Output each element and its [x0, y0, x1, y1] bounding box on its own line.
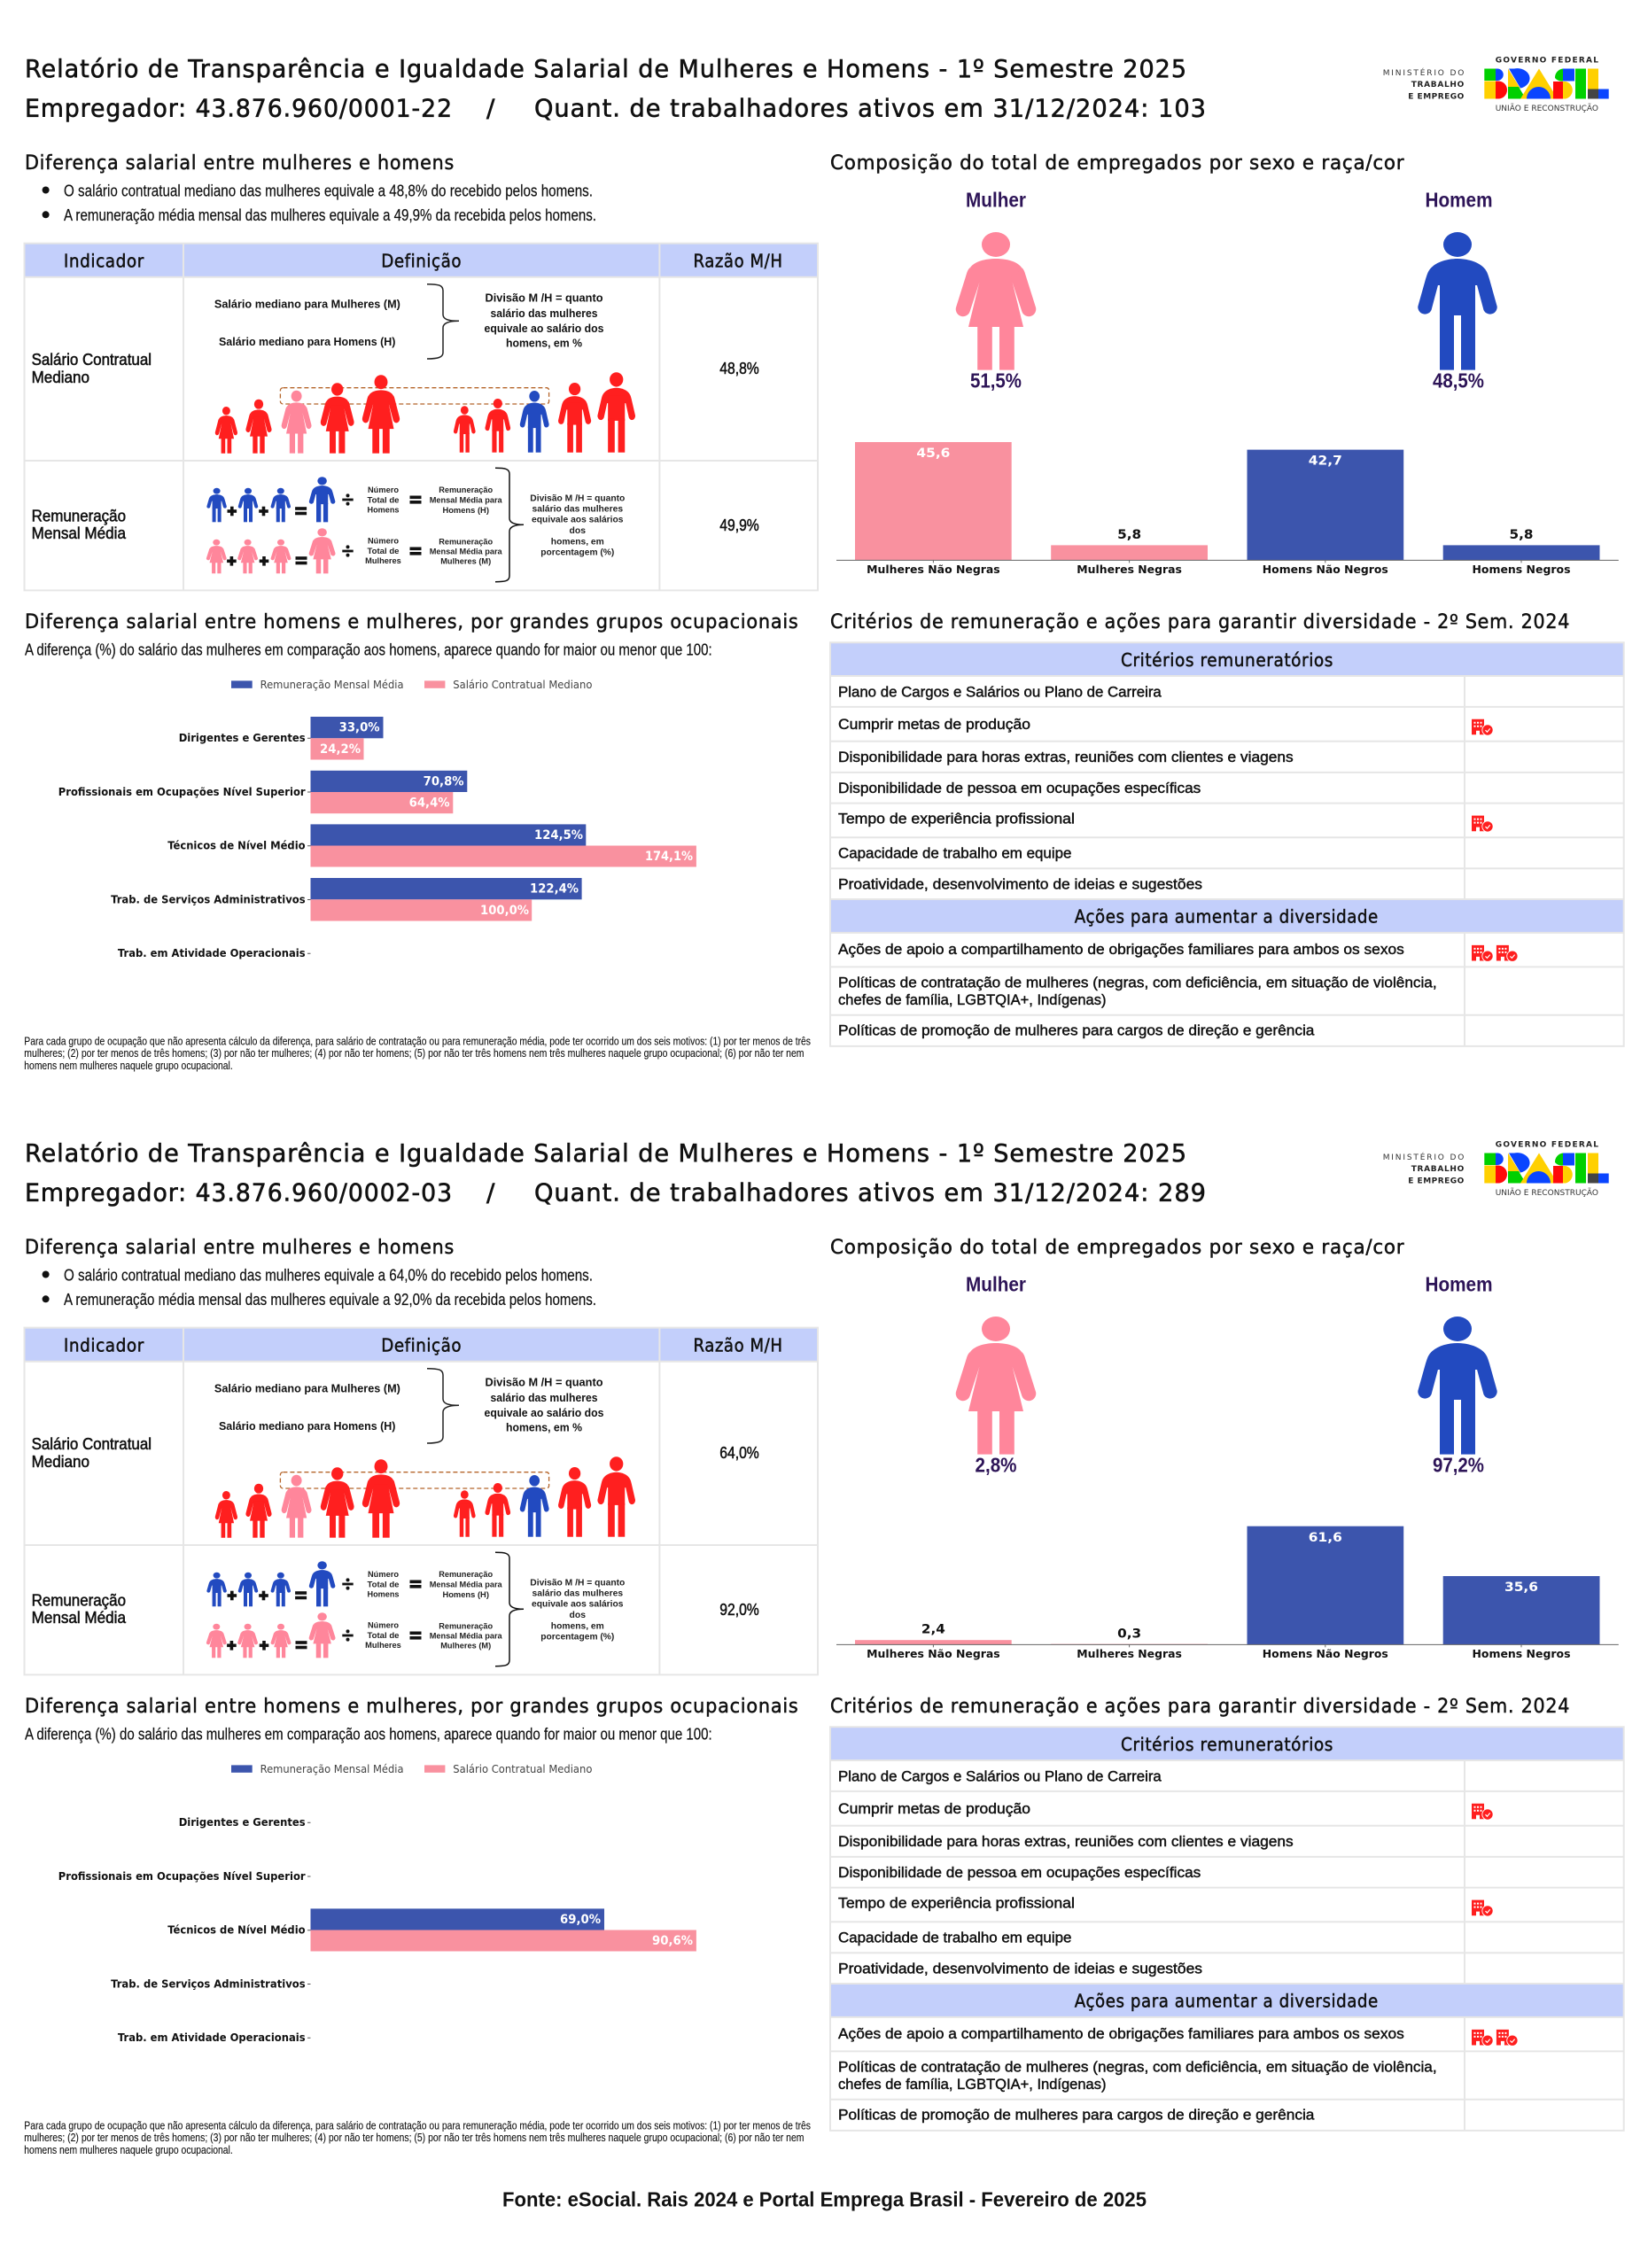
diagram: average pay definition: Mulheres (M)	[440, 557, 491, 567]
diagram: average pay definition: Mensal Média para	[430, 1632, 502, 1642]
legend: Remuneração Mensal Média	[260, 1763, 404, 1775]
bar chart: occupational ratio: Trab. de Serviços Administrativos	[111, 1977, 306, 1990]
title: report heading: Relatório de Transparência e Igualdade Salarial de Mulheres e Homens - 1º Semestre 2025	[25, 1138, 1187, 1168]
icon: woman with share: 51,5%	[970, 369, 1022, 392]
criteria table: Cumprir metas de produção	[838, 1801, 1030, 1817]
footnote: Para cada grupo de ocupação que não apresenta cálculo da diferença, para salário de contratação ou para remuneração média, pode ter ocorrido um dos seis motivos: (1) por ter menos de três	[24, 1035, 811, 1047]
bar chart: sex and race: 35,6	[1504, 1581, 1538, 1595]
diagram: average pay definition: Mensal Média para	[430, 1580, 502, 1589]
diagram: average pay definition: salário das mulheres	[532, 504, 623, 515]
bar chart: sex and race: Mulheres Negras	[1077, 1647, 1182, 1660]
bar chart: occupational ratio	[58, 717, 696, 959]
bar chart: occupational ratio: Técnicos de Nível Médio	[167, 1923, 306, 1937]
logo: Ministério do Trabalho e Emprego / Governo Federal Brasil: E EMPREGO	[1408, 1177, 1465, 1185]
diagram: average pay definition: Homens (H)	[442, 506, 489, 516]
logo: Ministério do Trabalho e Emprego / Governo Federal Brasil: TRABALHO	[1411, 81, 1465, 89]
icon: man with share: 97,2%	[1433, 1453, 1484, 1476]
diagram: average pay definition: homens, em	[551, 536, 604, 547]
logo: Ministério do Trabalho e Emprego / Governo Federal Brasil: MINISTÉRIO DO	[1383, 67, 1464, 78]
criteria table: Disponibilidade para horas extras, reuniões com clientes e viagens	[838, 1834, 1294, 1850]
indicator table: Mediano	[32, 369, 89, 386]
bar chart: sex and race: Homens Negros	[1473, 1647, 1570, 1660]
heading: occupational groups: Diferença salarial entre homens e mulheres, por grandes grupos ocupacionais	[25, 1696, 799, 1718]
legend: Salário Contratual Mediano	[453, 679, 592, 691]
heading: criteria: Critérios de remuneração e ações para garantir diversidade - 2º Sem. 2024	[830, 1696, 1570, 1718]
description: A diferença (%) do salário das mulheres em comparação aos homens, aparece quando for maior ou menor que 100:	[25, 1726, 712, 1744]
diagram: median salary definition: Divisão M /H = quanto	[486, 1376, 603, 1389]
bar chart: sex and race: 42,7	[1309, 454, 1342, 469]
footnote: mulheres; (2) por ter menos de três homens; (3) por não ter mulheres; (4) por não ter homens; (5) por não ter três homens nem três mulheres naquele grupo ocupacional; (6) por não ter nem	[24, 2132, 805, 2144]
indicator table	[25, 244, 818, 590]
bullet list: O salário contratual mediano das mulheres equivale a 48,8% do recebido pelos homens.	[64, 183, 593, 200]
indicator table: Definição	[381, 1335, 462, 1356]
bar chart: sex and race: 61,6	[1309, 1531, 1342, 1545]
diagram: average pay definition	[206, 1552, 625, 1666]
criteria table: Proatividade, desenvolvimento de ideias e sugestões	[838, 876, 1202, 892]
icon: man with share: 48,5%	[1433, 369, 1484, 392]
diagram: average pay definition: Mensal Média para	[430, 548, 502, 557]
report section: establishment 0001-22	[24, 54, 1624, 1072]
indicator table: Razão M/H	[693, 251, 783, 272]
indicator table: 48,8%	[719, 360, 759, 377]
bar chart: occupational ratio: 69,0%	[560, 1913, 601, 1927]
criteria table: Ações de apoio a compartilhamento de obrigações familiares para ambos os sexos	[838, 942, 1404, 958]
diagram: average pay definition: Número	[368, 537, 399, 547]
diagram: average pay definition: Divisão M /H = quanto	[530, 493, 625, 504]
bar chart: occupational ratio: Trab. em Atividade Operacionais	[118, 946, 306, 959]
bar chart: occupational ratio: Trab. em Atividade Operacionais	[118, 2031, 306, 2044]
logo: Ministério do Trabalho e Emprego / Governo Federal Brasil: UNIÃO E RECONSTRUÇÃO	[1496, 1188, 1598, 1198]
bar chart: occupational ratio: Dirigentes e Gerentes	[179, 731, 306, 744]
icon: man with share: Homem	[1425, 189, 1492, 212]
bar chart: occupational ratio: 70,8%	[424, 774, 464, 788]
indicator table: Salário Contratual	[32, 351, 152, 369]
diagram: average pay definition: dos	[570, 1610, 586, 1620]
subtitle: employer and worker count	[25, 94, 1207, 123]
bullet list	[43, 183, 596, 224]
panel: workforce composition	[830, 152, 1619, 576]
diagram: median salary definition: homens, em %	[506, 337, 582, 350]
subtitle: employer and worker count: Quant. de trabalhadores ativos em 31/12/2024: 289	[534, 1178, 1207, 1208]
diagram: average pay definition: Homens (H)	[442, 1590, 489, 1600]
bar chart: sex and race: 2,4	[921, 1623, 945, 1637]
diagram: median salary definition: salário das mulheres	[491, 307, 597, 320]
panel: workforce composition	[830, 1237, 1619, 1660]
icon: woman with share	[956, 1273, 1036, 1476]
diagram: average pay definition: homens, em	[551, 1620, 604, 1631]
diagram: average pay definition: Remuneração	[439, 1570, 493, 1580]
logo: Ministério do Trabalho e Emprego / Governo Federal Brasil: MINISTÉRIO DO	[1383, 1152, 1464, 1162]
diagram: average pay definition: Total de	[367, 547, 399, 556]
criteria table: Ações para aumentar a diversidade	[1075, 905, 1379, 927]
report section: establishment 0002-03	[24, 1138, 1624, 2156]
criteria table: Disponibilidade de pessoa em ocupações específicas	[838, 1865, 1201, 1881]
criteria table: Tempo de experiência profissional	[838, 811, 1075, 827]
criteria table: Ações de apoio a compartilhamento de obrigações familiares para ambos os sexos	[838, 2026, 1404, 2042]
bar chart: sex and race: Homens Não Negros	[1263, 563, 1388, 576]
criteria table: Ações para aumentar a diversidade	[1075, 1990, 1379, 2011]
subtitle: employer and worker count: /	[486, 1178, 495, 1208]
criteria table: Cumprir metas de produção	[838, 717, 1030, 733]
diagram: average pay definition	[206, 468, 625, 582]
icon: woman with share: Mulher	[966, 1273, 1026, 1296]
panel: remuneration criteria and diversity actions	[830, 1696, 1624, 2131]
diagram: median salary definition: equivale ao salário dos	[484, 1406, 604, 1419]
criteria table: Políticas de promoção de mulheres para cargos de direção e gerência	[838, 1023, 1315, 1039]
footnote: homens nem mulheres naquele grupo ocupacional.	[24, 1060, 233, 1072]
criteria table: Plano de Cargos e Salários ou Plano de Carreira	[838, 1768, 1162, 1784]
bar chart: occupational ratio: Profissionais em Ocupações Nível Superior	[58, 785, 306, 798]
diagram: average pay definition: Mulheres (M)	[440, 1642, 491, 1651]
panel: remuneration criteria and diversity actions	[830, 611, 1624, 1046]
indicator table: Indicador	[64, 251, 144, 272]
criteria table: Tempo de experiência profissional	[838, 1895, 1075, 1911]
legend	[231, 1763, 592, 1775]
bar chart: occupational ratio: 124,5%	[534, 828, 583, 843]
heading: composition: Composição do total de empregados por sexo e raça/cor	[830, 152, 1405, 175]
indicator table: 92,0%	[719, 1601, 759, 1619]
icon: man with share	[1418, 189, 1497, 392]
criteria table: chefes de família, LGBTQIA+, Indígenas)	[838, 2077, 1106, 2093]
icon: woman with share: Mulher	[966, 189, 1026, 212]
description: A diferença (%) do salário das mulheres em comparação aos homens, aparece quando for maior ou menor que 100:	[25, 641, 712, 659]
icon: woman with share	[956, 189, 1036, 392]
bar chart: sex and race: 5,8	[1510, 528, 1533, 542]
indicator table: Salário Contratual	[32, 1435, 152, 1453]
diagram: average pay definition: Mensal Média para	[430, 495, 502, 505]
bar chart: sex and race	[836, 442, 1619, 576]
indicator table: Mensal Média	[32, 1609, 127, 1627]
diagram: average pay definition: Remuneração	[439, 1621, 493, 1631]
diagram: median salary definition: homens, em %	[506, 1421, 582, 1434]
diagram: average pay definition: equivale aos salários	[532, 1598, 624, 1609]
bar chart: occupational ratio: 24,2%	[320, 742, 361, 757]
criteria table: Políticas de contratação de mulheres (negras, com deficiência, em situação de violência,	[838, 2060, 1437, 2076]
heading: salary difference: Diferença salarial entre mulheres e homens	[25, 1237, 455, 1259]
diagram: average pay definition: Número	[368, 1570, 399, 1580]
indicator table: Definição	[381, 251, 462, 272]
criteria table: Proatividade, desenvolvimento de ideias e sugestões	[838, 1961, 1202, 1977]
diagram: average pay definition: porcentagem (%)	[540, 548, 614, 558]
criteria table	[830, 1727, 1624, 2131]
legend: Remuneração Mensal Média	[260, 679, 404, 691]
bar chart: occupational ratio: 90,6%	[652, 1934, 693, 1948]
subtitle: employer and worker count: /	[486, 94, 495, 123]
subtitle: employer and worker count: Quant. de trabalhadores ativos em 31/12/2024: 103	[534, 94, 1207, 123]
bullet list: A remuneração média mensal das mulheres equivale a 92,0% da recebida pelos homens.	[64, 1291, 596, 1309]
bar chart: sex and race: 45,6	[916, 447, 950, 461]
bar chart: occupational ratio: 100,0%	[480, 904, 529, 918]
diagram: average pay definition: salário das mulheres	[532, 1588, 623, 1599]
criteria table: Critérios remuneratórios	[1121, 1734, 1333, 1755]
indicator table: 49,9%	[719, 517, 759, 534]
logo: Ministério do Trabalho e Emprego / Governo Federal Brasil: TRABALHO	[1411, 1165, 1465, 1174]
bar chart: occupational ratio: Profissionais em Ocupações Nível Superior	[58, 1869, 306, 1883]
source line: Fonte: eSocial. Rais 2024 e Portal Emprega Brasil - Fevereiro de 2025	[502, 2188, 1147, 2211]
panel: salary difference	[25, 1237, 818, 1674]
diagram: median salary definition	[214, 284, 635, 454]
indicator table: 64,0%	[719, 1444, 759, 1462]
criteria table: Plano de Cargos e Salários ou Plano de Carreira	[838, 684, 1162, 700]
heading: salary difference: Diferença salarial entre mulheres e homens	[25, 152, 455, 175]
diagram: median salary definition: Salário mediano para Mulheres (M)	[214, 297, 400, 310]
criteria table: Políticas de contratação de mulheres (negras, com deficiência, em situação de violência,	[838, 975, 1437, 991]
diagram: average pay definition: Total de	[367, 1580, 399, 1589]
footnote: homens nem mulheres naquele grupo ocupacional.	[24, 2144, 233, 2156]
panel: occupational groups	[24, 611, 811, 1072]
diagram: average pay definition: Remuneração	[439, 485, 493, 495]
bullet list	[43, 1267, 596, 1309]
logo: Ministério do Trabalho e Emprego / Governo Federal Brasil	[1383, 1141, 1609, 1198]
diagram: average pay definition: Mulheres	[365, 556, 401, 566]
criteria table: Critérios remuneratórios	[1121, 649, 1333, 671]
indicator table: Remuneração	[32, 507, 126, 524]
diagram: average pay definition: Homens	[367, 505, 399, 515]
indicator table: Remuneração	[32, 1591, 126, 1609]
bar chart: occupational ratio	[58, 1815, 696, 2044]
footnote: Para cada grupo de ocupação que não apresenta cálculo da diferença, para salário de contratação ou para remuneração média, pode ter ocorrido um dos seis motivos: (1) por ter menos de três	[24, 2119, 811, 2132]
bar chart: sex and race: Mulheres Negras	[1077, 563, 1182, 576]
bar chart: sex and race: Homens Não Negros	[1263, 1647, 1388, 1660]
panel: salary difference	[25, 152, 818, 590]
bar chart: occupational ratio: 64,4%	[409, 796, 450, 811]
diagram: median salary definition: Salário mediano para Homens (H)	[219, 335, 395, 348]
diagram: average pay definition: Número	[368, 485, 399, 495]
criteria table: Capacidade de trabalho em equipe	[838, 1930, 1071, 1946]
heading: criteria: Critérios de remuneração e ações para garantir diversidade - 2º Sem. 2024	[830, 611, 1570, 633]
bar chart: sex and race: 0,3	[1117, 1627, 1141, 1641]
logo: Ministério do Trabalho e Emprego / Governo Federal Brasil: E EMPREGO	[1408, 92, 1465, 101]
bar chart: occupational ratio: Dirigentes e Gerentes	[179, 1815, 306, 1829]
diagram: average pay definition: equivale aos salários	[532, 514, 624, 524]
diagram: median salary definition: equivale ao salário dos	[484, 322, 604, 335]
icon: woman with share: 2,8%	[975, 1453, 1017, 1476]
bullet list: O salário contratual mediano das mulheres equivale a 64,0% do recebido pelos homens.	[64, 1267, 593, 1285]
logo: Ministério do Trabalho e Emprego / Governo Federal Brasil: GOVERNO FEDERAL	[1496, 57, 1598, 66]
criteria table: Disponibilidade de pessoa em ocupações específicas	[838, 781, 1201, 796]
criteria table	[830, 642, 1624, 1046]
heading: occupational groups: Diferença salarial entre homens e mulheres, por grandes grupos ocupacionais	[25, 611, 799, 633]
diagram: average pay definition: Total de	[367, 1631, 399, 1641]
diagram: median salary definition: Salário mediano para Mulheres (M)	[214, 1381, 400, 1394]
subtitle: employer and worker count	[25, 1178, 1207, 1208]
icon: man with share	[1418, 1273, 1497, 1476]
bar chart: sex and race: Mulheres Não Negras	[867, 563, 1000, 576]
indicator table: Mensal Média	[32, 524, 127, 542]
indicator table	[25, 1328, 818, 1674]
subtitle: employer and worker count: Empregador: 43.876.960/0001-22	[25, 94, 453, 123]
bar chart: sex and race: Mulheres Não Negras	[867, 1647, 1000, 1660]
diagram: average pay definition: Divisão M /H = quanto	[530, 1578, 625, 1588]
diagram: average pay definition: Homens	[367, 1589, 399, 1599]
footnote	[24, 2119, 811, 2156]
logo: Ministério do Trabalho e Emprego / Governo Federal Brasil: UNIÃO E RECONSTRUÇÃO	[1496, 104, 1598, 113]
footnote: mulheres; (2) por ter menos de três homens; (3) por não ter mulheres; (4) por não ter homens; (5) por não ter três homens nem três mulheres naquele grupo ocupacional; (6) por não ter nem	[24, 1047, 805, 1060]
diagram: average pay definition: Número	[368, 1621, 399, 1631]
criteria table: Capacidade de trabalho em equipe	[838, 845, 1071, 861]
indicator table: Indicador	[64, 1335, 144, 1356]
criteria table: Políticas de promoção de mulheres para cargos de direção e gerência	[838, 2108, 1315, 2124]
legend	[231, 679, 592, 691]
diagram: median salary definition: salário das mulheres	[491, 1391, 597, 1404]
diagram: average pay definition: porcentagem (%)	[540, 1632, 614, 1643]
diagram: average pay definition: Total de	[367, 495, 399, 505]
heading: composition: Composição do total de empregados por sexo e raça/cor	[830, 1237, 1405, 1259]
bar chart: occupational ratio: Técnicos de Nível Médio	[167, 839, 306, 852]
bullet list: A remuneração média mensal das mulheres equivale a 49,9% da recebida pelos homens.	[64, 206, 596, 224]
logo: Ministério do Trabalho e Emprego / Governo Federal Brasil	[1383, 57, 1609, 113]
footnote	[24, 1035, 811, 1072]
bar chart: sex and race: Homens Negros	[1473, 563, 1570, 576]
indicator table: Mediano	[32, 1453, 89, 1471]
criteria table: Disponibilidade para horas extras, reuniões com clientes e viagens	[838, 750, 1294, 765]
icon: man with share: Homem	[1425, 1273, 1492, 1296]
subtitle: employer and worker count: Empregador: 43.876.960/0002-03	[25, 1178, 453, 1208]
diagram: average pay definition: Remuneração	[439, 537, 493, 547]
title: report heading: Relatório de Transparência e Igualdade Salarial de Mulheres e Homens - 1º Semestre 2025	[25, 54, 1187, 83]
bar chart: occupational ratio: 122,4%	[530, 882, 579, 897]
bar chart: occupational ratio: 33,0%	[339, 721, 380, 735]
bar chart: sex and race	[836, 1526, 1619, 1660]
diagram: median salary definition: Divisão M /H = quanto	[486, 291, 603, 305]
bar chart: occupational ratio: Trab. de Serviços Administrativos	[111, 892, 306, 905]
legend: Salário Contratual Mediano	[453, 1763, 592, 1775]
diagram: average pay definition: Mulheres	[365, 1641, 401, 1651]
criteria table: chefes de família, LGBTQIA+, Indígenas)	[838, 992, 1106, 1008]
diagram: median salary definition	[214, 1369, 635, 1538]
logo: Ministério do Trabalho e Emprego / Governo Federal Brasil: GOVERNO FEDERAL	[1496, 1141, 1598, 1150]
panel: occupational groups	[24, 1696, 811, 2156]
indicator table: Razão M/H	[693, 1335, 783, 1356]
bar chart: occupational ratio: 174,1%	[645, 850, 693, 864]
diagram: median salary definition: Salário mediano para Homens (H)	[219, 1419, 395, 1433]
diagram: average pay definition: dos	[570, 525, 586, 536]
bar chart: sex and race: 5,8	[1117, 528, 1141, 542]
